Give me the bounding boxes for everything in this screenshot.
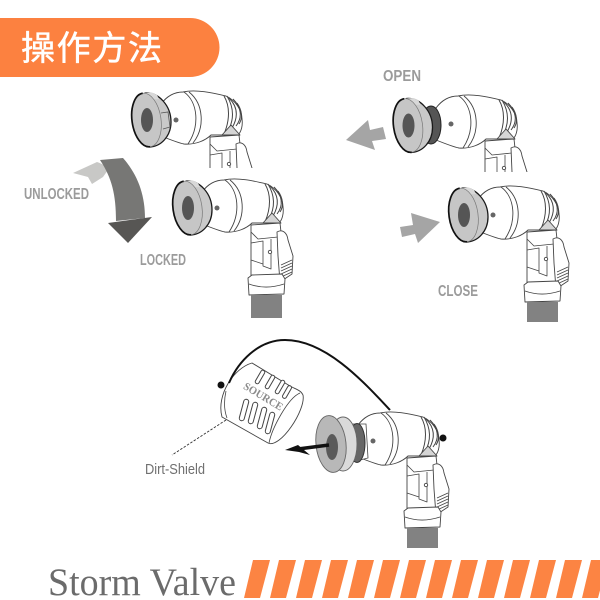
arrow: close direction xyxy=(400,213,440,243)
label: open: OPEN xyxy=(383,68,421,85)
shield slots xyxy=(239,370,292,434)
removal arrow xyxy=(285,445,329,455)
tether cord xyxy=(218,340,446,442)
label: close: CLOSE xyxy=(438,283,478,300)
title banner xyxy=(0,18,220,77)
valve: locked position xyxy=(169,179,293,318)
arrow: open direction xyxy=(346,120,386,150)
label: unlocked: UNLOCKED xyxy=(24,186,89,203)
dirt-shield leader line xyxy=(172,420,226,455)
valve with cap removed xyxy=(313,412,449,548)
label: dirt-shield: Dirt-Shield xyxy=(145,461,205,478)
valve: closed position xyxy=(445,186,569,322)
dirt-shield cap xyxy=(221,363,303,444)
title banner: 操作方法 xyxy=(21,30,162,68)
label: locked: LOCKED xyxy=(140,252,186,269)
curved rotation arrow xyxy=(73,158,152,243)
striped decoration xyxy=(244,560,600,598)
valve: open position xyxy=(392,94,528,172)
shield logo: SOURCE xyxy=(241,381,285,413)
valve: unlocked position xyxy=(130,90,252,168)
